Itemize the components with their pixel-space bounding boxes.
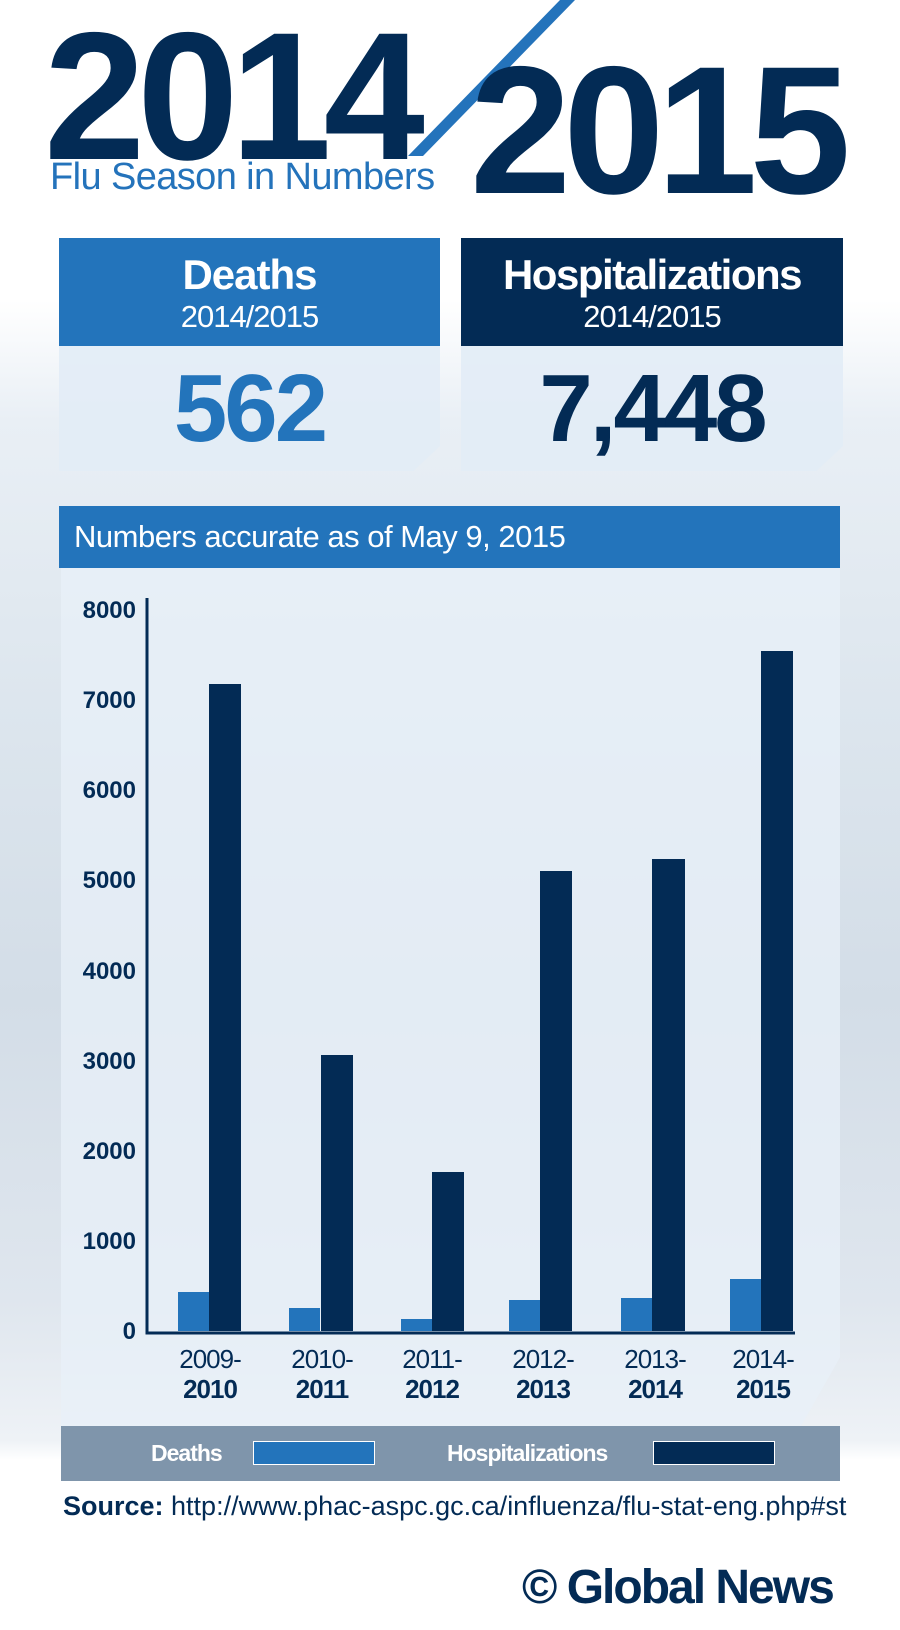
hospitalizations header: 2014/2015 — [583, 299, 721, 334]
deaths header: 2014/2015 — [181, 299, 318, 334]
y axis labels: 5000 — [83, 867, 136, 894]
title — [44, 0, 846, 232]
y axis labels: 4000 — [83, 958, 136, 985]
x axis labels: 2010- — [291, 1344, 353, 1374]
panel: hospitalizations — [461, 238, 843, 456]
legend — [61, 1426, 840, 1481]
hospitalizations value: 7,448 — [539, 355, 765, 462]
x axis labels — [179, 1344, 794, 1404]
axes — [147, 598, 795, 1333]
y axis labels: 0 — [123, 1318, 136, 1345]
x axis labels: 2013- — [624, 1344, 686, 1374]
bars — [178, 651, 793, 1331]
x axis labels: 2012- — [512, 1344, 574, 1374]
deaths header — [59, 238, 440, 346]
title: 2015: 2015 — [470, 28, 843, 232]
x axis labels: 2010 — [183, 1374, 237, 1404]
subtitle: Flu Season in Numbers — [50, 156, 434, 198]
chart panel — [61, 677, 840, 1298]
y axis labels: 2000 — [83, 1138, 136, 1165]
y axis labels: 8000 — [83, 597, 136, 624]
logo: Global News: © Global News — [522, 1561, 833, 1614]
x axis labels: 2014 — [628, 1374, 683, 1404]
title: 2014: 2014 — [44, 0, 417, 198]
banner: accuracy note — [59, 506, 840, 568]
y axis labels: 7000 — [83, 687, 136, 714]
deaths header: Deaths — [182, 251, 317, 298]
deaths value: 562 — [174, 355, 325, 462]
x axis labels: 2012 — [405, 1374, 459, 1404]
hospitalizations header — [461, 238, 843, 346]
banner: accuracy note: Numbers accurate as of May 9, 2015 — [74, 519, 565, 554]
x axis labels: 2011 — [296, 1374, 349, 1404]
panel: deaths — [59, 238, 440, 442]
y axis labels — [83, 597, 136, 1345]
x axis labels: 2014- — [732, 1344, 794, 1374]
y axis labels: 3000 — [83, 1048, 136, 1075]
y axis labels: 6000 — [83, 777, 136, 804]
hospitalizations value — [461, 346, 843, 456]
x axis labels: 2009- — [179, 1344, 241, 1374]
legend: deaths — [151, 1440, 375, 1466]
legend: hospitalizations: Hospitalizations — [447, 1440, 607, 1466]
deaths value — [59, 346, 440, 442]
x axis labels: 2011- — [402, 1344, 462, 1374]
legend: deaths: Deaths — [151, 1440, 222, 1466]
slash — [408, 0, 575, 156]
y axis labels: 1000 — [83, 1228, 136, 1255]
hospitalizations header: Hospitalizations — [503, 251, 801, 298]
x axis labels: 2015 — [736, 1374, 790, 1404]
source: Source: http://www.phac-aspc.gc.ca/influenza/flu-stat-eng.php#st — [63, 1491, 846, 1521]
legend: hospitalizations — [447, 1440, 775, 1466]
x axis labels: 2013 — [516, 1374, 570, 1404]
